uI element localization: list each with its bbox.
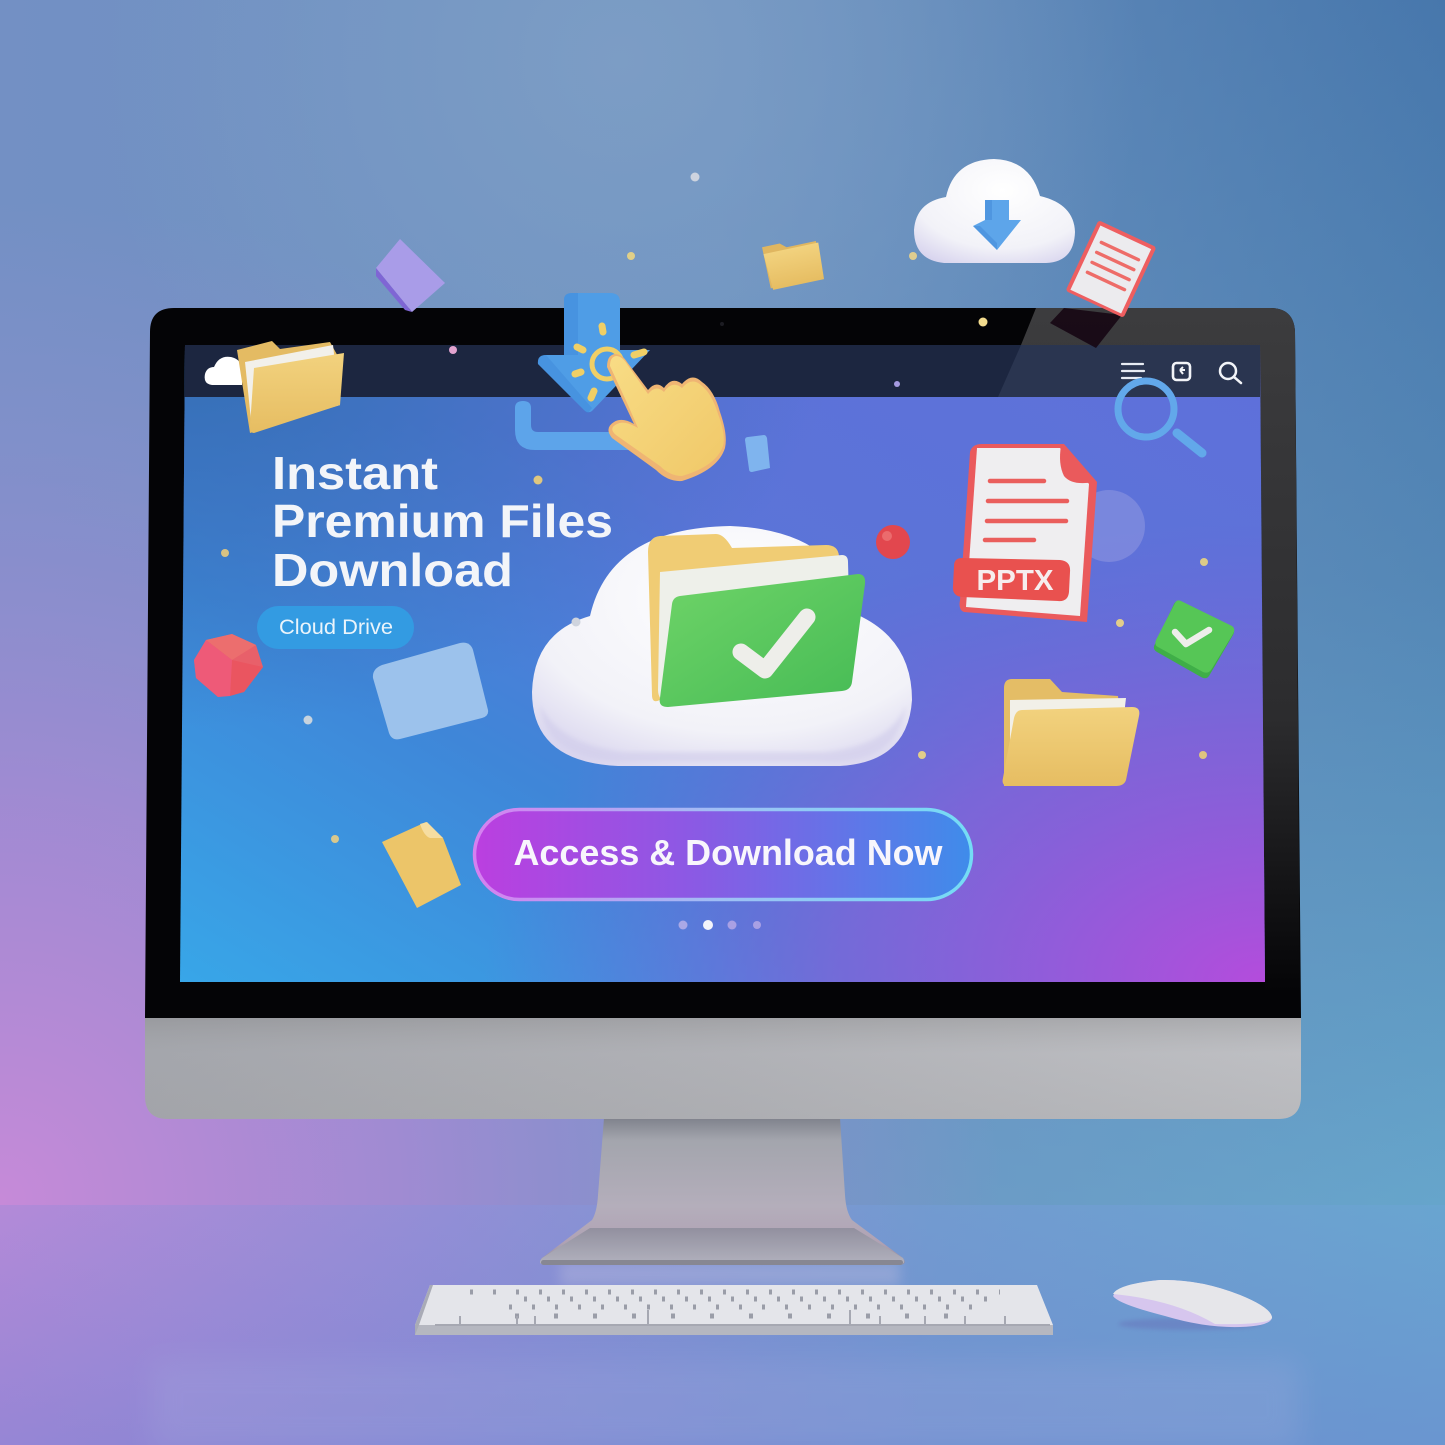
keyboard bbox=[415, 1285, 1053, 1335]
nav download box icon bbox=[1173, 363, 1190, 380]
nav logo cloud bbox=[205, 357, 242, 385]
icon: pointing hand cursor bbox=[607, 354, 726, 481]
camera dot bbox=[720, 322, 724, 326]
bezel reflection bbox=[1021, 308, 1300, 990]
icon: large central cloud bbox=[532, 526, 912, 766]
icon: floating red document bbox=[1066, 220, 1156, 318]
button: Access & Download Now: Access & Download Now bbox=[514, 832, 943, 873]
nav menu icon bbox=[1122, 364, 1144, 378]
icon: purple cube bbox=[376, 239, 445, 312]
icon: blue magnifying glass bbox=[1118, 381, 1202, 453]
icon: green check tile bbox=[1154, 600, 1234, 678]
check mark bbox=[741, 617, 807, 670]
icon: PPTX document bbox=[953, 444, 1097, 622]
monitor stand bbox=[540, 1118, 905, 1265]
carousel dots bbox=[678, 920, 761, 930]
floating dots above monitor bbox=[449, 172, 988, 387]
floating dots on screen bbox=[221, 476, 1208, 843]
title: Instant Premium Files Download bbox=[272, 447, 613, 596]
icon: small blue tile bbox=[745, 435, 770, 472]
icon: blue download arrow bbox=[538, 293, 650, 413]
monitor chin bbox=[145, 1010, 1301, 1119]
screen bbox=[180, 345, 1265, 982]
pill: Cloud Drive: Cloud Drive bbox=[279, 616, 393, 639]
icon: floating yellow folder bbox=[762, 236, 826, 290]
shadow of floating document on bezel bbox=[1050, 308, 1122, 348]
mouse bbox=[1113, 1280, 1272, 1330]
title: Instant Premium Files Download: Download bbox=[272, 544, 513, 596]
click sparkle bbox=[575, 326, 644, 398]
button: Access & Download Now bbox=[474, 810, 972, 900]
PPTX label: PPTX bbox=[976, 565, 1054, 597]
icon: red ball bbox=[876, 525, 910, 559]
title: Instant Premium Files Download: Instant bbox=[272, 447, 438, 499]
icon: yellow document bbox=[382, 822, 461, 908]
desk surface bbox=[0, 1205, 1445, 1445]
top navigation bar bbox=[185, 345, 1260, 397]
icon: blue download tray bbox=[515, 401, 630, 450]
pill: Cloud Drive bbox=[257, 606, 414, 649]
icon: yellow folder lower right bbox=[1003, 679, 1139, 786]
icon: green folder with check bbox=[648, 534, 865, 707]
nav search icon bbox=[1220, 363, 1241, 383]
monitor bbox=[145, 308, 1301, 1265]
PPTX label bbox=[953, 558, 1070, 601]
title: Instant Premium Files Download: Premium Files bbox=[272, 495, 613, 547]
icon: top cloud with download arrow bbox=[914, 159, 1075, 263]
icon: pale blue tile bbox=[373, 643, 488, 739]
faint circle bbox=[1073, 490, 1145, 562]
monitor bezel bbox=[145, 308, 1301, 1018]
icon: yellow folder top left bbox=[237, 341, 344, 433]
icon: red cube bbox=[194, 634, 263, 697]
